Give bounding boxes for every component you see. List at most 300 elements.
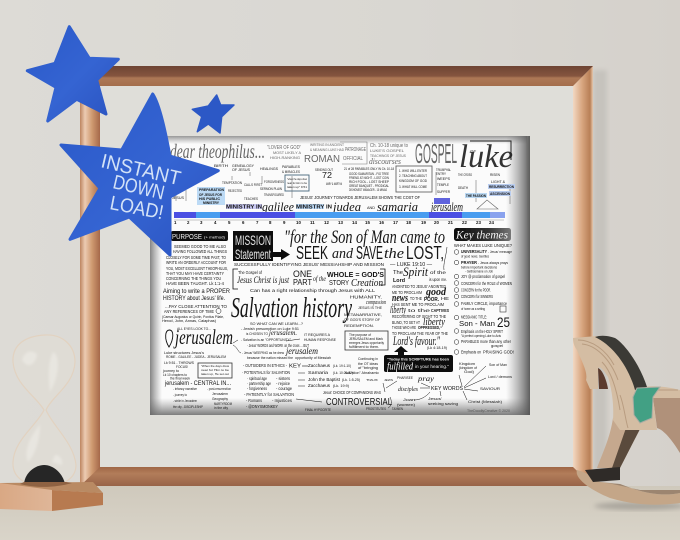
badge text <box>99 150 183 224</box>
text block: the spirit of the Lord: TO THE <box>410 296 422 301</box>
quote: Luke 19:10: "for the Son of Man came to <box>284 227 445 248</box>
theme list: CONCERN for SINNERS <box>461 294 493 299</box>
word map: key words: JEWS <box>384 378 393 382</box>
horse: wood grain <box>578 340 678 428</box>
text block: what can we learn: SO WHAT CAN WE LEARN...? <box>250 321 304 326</box>
text: bringing salvation: the OT ideas <box>358 362 378 366</box>
statement: controversial choices: FINAL HYPOCRITE <box>305 408 331 412</box>
theme list: FAMILY CIRCLE, importance <box>461 301 508 306</box>
theme list: - Jesus' message <box>488 250 512 254</box>
horse: saddle <box>633 387 660 423</box>
timeline chapter numbers: 19 <box>421 220 426 225</box>
word map: key words: Kingdom <box>459 362 475 366</box>
text block: the spirit of the Lord: POOR. <box>424 297 440 303</box>
note: lover of God: PATRONAGE <box>345 147 366 153</box>
text block: the spirit of the Lord: The <box>393 270 403 276</box>
note: lover of God: & MEANING LUKE HAD <box>310 148 344 152</box>
timeline annotations: right: FRIEND AT NIGHT - LOST COIN <box>349 176 390 180</box>
text block: central in list: MARTYRDOM <box>214 402 232 406</box>
callout: preparations: HIS PUBLIC <box>199 197 221 201</box>
text block: what can we learn: is CHOSEN TO <box>246 331 268 336</box>
picture frame <box>80 66 607 486</box>
statement: controversial choices: TAXMEN <box>392 407 403 411</box>
frame: left side <box>80 66 100 486</box>
text: Luke reference: — LUKE 19:10 — <box>390 262 432 268</box>
callout: when the days drew near: "When the days drew <box>201 364 230 368</box>
text block: route to jerusalem <box>162 351 226 380</box>
note: lover of God: OFFICIAL <box>343 156 363 162</box>
timeline annotations: right: DISHONEST MANAGER - 10 MINAS <box>349 188 388 192</box>
text block: what can we learn: because the nation missed the <box>247 355 294 360</box>
note: lover of God: WRITING IN ANCIENT <box>310 143 345 147</box>
rocking horse <box>573 336 680 510</box>
heading: all eyes look to jerusalem: jerusalem <box>173 325 233 349</box>
word map: key words: seeking saving <box>428 402 458 406</box>
text: bringing salvation: Continuing in <box>358 357 378 361</box>
text block: proper history: HISTORY about Jesus' life. <box>163 295 225 302</box>
text: relationship with all humanity <box>250 288 382 300</box>
theme list: JOY @ proclamation of gospel <box>461 274 505 279</box>
callout: the purpose of jerusalem <box>345 331 388 350</box>
text block: outsiders: - rejoice <box>276 381 291 386</box>
horse: mane <box>595 336 647 390</box>
text block: route to jerusalem: Lk 10 chapters to <box>163 373 187 377</box>
callout: when the days drew near: taken up, He set out <box>201 372 229 376</box>
text block: the spirit of the Lord: ANOINTED TO JESUS' ANOINTED <box>392 284 446 289</box>
callout: boxed quote timeline: MARY & MARTHA <box>326 182 342 186</box>
timeline chapter numbers: 13 <box>338 220 343 225</box>
text: relationship with all humanity: Can has a right relationship through Jesus with ALL <box>250 288 376 293</box>
text: bringing salvation <box>345 357 379 375</box>
text block: the spirit of the Lord: HE <box>441 296 449 301</box>
timeline chapter numbers: 1 <box>174 220 177 225</box>
text block: outsiders: - forgiveness <box>247 386 267 391</box>
note: chapters 10-18: Ch. 10-18 unique to <box>370 143 408 149</box>
text block: central in list: Geography <box>212 397 228 401</box>
panel: what makes Luke unique <box>444 243 514 354</box>
text block: what can we learn: - Jesus' WEEPING as he drew <box>242 350 284 355</box>
panel: mission statement: MISSION <box>235 232 271 248</box>
callout: when the days drew near: near for Him to be <box>201 368 229 372</box>
text block: central in list <box>173 387 232 410</box>
text block: route to jerusalem: Luke structures Jesus's <box>164 351 204 355</box>
boxed list: three lost things <box>396 166 432 192</box>
timeline chapter numbers: 21 <box>448 220 453 225</box>
text block: purpose: CLOSELY FOR SOME TIME PAST, TO <box>166 255 227 260</box>
text block: what can we learn: jerusalem <box>285 346 318 356</box>
text block: the spirit of the Lord: TO PROCLAIM THE YEAR OF THE <box>392 331 448 336</box>
timeline chapter numbers: 7 <box>256 220 259 225</box>
hourglass: glass bulbs <box>13 335 76 486</box>
theme list: Emphasis on <box>461 350 482 354</box>
timeline chapter numbers: 20 <box>434 220 439 225</box>
statement: one part of the whole <box>233 269 385 289</box>
theme list: Emphasis on the HOLY SPIRIT <box>461 329 503 334</box>
timeline chapter numbers: 10 <box>296 220 301 225</box>
callout: the purpose of jerusalem: fulfillment to them. <box>349 345 379 349</box>
text block: outsiders: - courage <box>276 386 293 391</box>
callout: preparations: MINISTRY <box>203 201 220 205</box>
poster inner shadow <box>150 136 530 415</box>
timeline chapter numbers: 4 <box>214 220 217 225</box>
timeline annotations: right: ENTRY <box>436 172 447 176</box>
text block: purpose: HAVING FOLLOWED ALL THINGS <box>173 249 227 254</box>
timeline annotations: right: DEATH <box>458 186 469 190</box>
text block: the spirit of the Lord: Spirit <box>403 264 428 279</box>
theme list: MESSIANIC TITLE: <box>461 314 487 320</box>
text block: outsiders: KEY <box>289 364 301 370</box>
timeline annotations: right: GREAT BANQUET - PRODIGAL <box>349 184 389 188</box>
text block: what can we learn: opportunity of Messiah <box>295 355 331 360</box>
text block: proper history: Aiming to write a PROPER <box>163 288 230 295</box>
text block: proper history: (Caesar Augustus or Quirin, Pontius Pilate, <box>162 315 224 319</box>
timeline annotations: right: SUPPER <box>437 190 451 194</box>
timeline chapter numbers: 18 <box>406 220 411 225</box>
text block: the spirit of the Lord: good <box>425 286 446 298</box>
timeline chapter numbers: 6 <box>242 220 245 225</box>
text block: outsiders: - PATIENTLY for SALVATION <box>244 392 294 397</box>
note: lover of God: MOST LIKELY A <box>273 151 302 155</box>
timeline chapter numbers: 11 <box>310 220 315 225</box>
list: key people: Zacchaeus <box>308 383 331 389</box>
hourglass: highlights <box>22 352 62 465</box>
callout: when the days drew near <box>198 363 232 378</box>
word map: key words: Joan <box>403 398 415 402</box>
hourglass: black sand <box>24 465 65 487</box>
note: chapters 10-18: discourses <box>369 157 401 166</box>
heading: purpose pill: PURPOSE <box>172 232 202 241</box>
timeline annotations: left: REJECTED <box>228 189 242 193</box>
horse: rocker <box>577 470 680 505</box>
poster content: GOSPEL <box>415 138 457 169</box>
panel: what makes Luke unique: WHAT MAKES LUKE UNIQUE? <box>454 243 513 248</box>
list: key people: (Lk. 1:5-25) <box>342 378 361 382</box>
star: large top-left <box>27 27 118 121</box>
text block: proper history: ...PAY CLOSE ATTENTION TO <box>165 304 228 309</box>
text: Luke reference <box>234 262 432 268</box>
timeline annotations: left: TEACHES <box>244 197 259 201</box>
callout: preparations: PREPARATION <box>199 188 225 192</box>
horse: neck and body <box>573 336 680 430</box>
frame: right side <box>573 66 593 486</box>
text block: purpose <box>166 244 228 286</box>
timeline chapter numbers: 12 <box>324 220 329 225</box>
statement: one part of the whole: STORY <box>329 280 349 287</box>
timeline annotations: left: FORGIVENESS <box>264 180 285 184</box>
quote: Luke 19:10: and <box>332 246 353 262</box>
text block: proper history: ANY REFERENCES OF TIME <box>164 309 214 314</box>
word map: key words: TheDoodlyCreative © 2020 <box>467 409 510 413</box>
callout: boxed quote timeline: 72 <box>322 171 333 180</box>
heading: dear theophilus: dear theophilus... <box>170 141 265 163</box>
timeline annotations: left: SERMON PLAIN <box>260 187 283 191</box>
heading: purpose pill <box>171 231 228 241</box>
timeline annotations: right: TEMPLE <box>437 183 450 187</box>
theme list: UNIVERSALITY <box>461 249 487 254</box>
text: relationship with all humanity: HUMANITY. <box>350 294 382 300</box>
timeline annotations: left: & MIRACLES <box>282 170 301 174</box>
timeline annotations: left: PARABLES <box>282 165 301 169</box>
text block: route to jerusalem: FOCUS! <box>176 365 188 369</box>
text block: purpose: YOU, MOST EXCELLENT THEOPHILUS, <box>166 266 228 271</box>
timeline chapter numbers: 14 <box>352 220 357 225</box>
text block: outsiders: - spiritual age <box>247 376 268 381</box>
timeline annotations: right: GOOD SAMARITAN - FIG TREE <box>349 172 390 176</box>
timeline annotations: right: 21 of 28 PARABLES ONLY IN Ch. 10-18 <box>344 166 395 171</box>
word map: key words: disciples <box>398 387 419 393</box>
word map: key words: PHARISEE <box>397 376 413 380</box>
text block: the spirit of the Lord: THOSE WHO ARE <box>392 325 416 330</box>
statement: controversial choices: PROSTITUTES <box>366 407 387 411</box>
text block: outsiders: - @ONYXMONKEY <box>246 404 278 409</box>
timeline chapter numbers: 15 <box>365 220 370 225</box>
word map: key words: Jesus' <box>428 397 442 401</box>
word map: key words: (kingdom of <box>459 366 477 370</box>
boxed list: three lost things: 3. WHAT WILL COME <box>399 185 427 189</box>
word map: key words: pray <box>417 375 435 383</box>
text block: outsiders: - Injustices <box>272 398 292 403</box>
poster paper <box>150 136 530 415</box>
callout: resurrection and ascension: RESURRECTION <box>489 185 514 189</box>
timeline annotations: right: RISEN <box>490 173 501 177</box>
text block: outsiders: - Romans <box>246 398 262 403</box>
text block: central in list: - while in Jerusalem <box>173 399 197 403</box>
text block: route to jerusalem: ROME - GALILEE - JUDEA - JERUSALEM <box>166 355 226 359</box>
note: lover of God <box>267 142 367 165</box>
text block: compassion column: OF GOD'S STORY OF <box>344 317 381 322</box>
timeline chapter numbers <box>174 220 494 225</box>
poster content <box>162 138 515 413</box>
callout: the purpose of jerusalem: emerges Jesus opportunity <box>349 341 384 345</box>
text block: central in list: in the city <box>214 406 228 410</box>
callout: boxed quote timeline: taken up" 9:51 <box>287 185 307 189</box>
callout: today this scripture fulfilled: in your hearing." <box>415 364 450 369</box>
list: key people: Samaria <box>308 370 328 376</box>
text block: central in list: the city - DISCIPLESHIP <box>173 405 204 409</box>
heading: jerusalem central in: jerusalem - CENTRAL IN... <box>164 381 231 387</box>
horse shadow <box>594 502 680 510</box>
text block: the spirit of the Lord: Lord <box>393 278 405 284</box>
timeline heading labels: MINISTRY IN <box>296 204 332 210</box>
word map: key words: Christ (Messiah) <box>468 400 503 404</box>
callout: resurrection and ascension: LIGHT & <box>491 180 505 184</box>
header band <box>170 138 457 169</box>
word map: key words: Lord / demons <box>488 375 512 379</box>
text block: the spirit of the Lord: CAPTIVES <box>431 308 449 313</box>
callout: the purpose of jerusalem: JERUSALEM and Mark <box>349 337 383 341</box>
badge text: DOWN <box>111 171 166 205</box>
text block: what can we learn <box>233 321 336 360</box>
timeline chapter numbers: 2 <box>187 220 190 225</box>
word map: key words: KEY WORDS <box>431 386 463 392</box>
timeline bar <box>174 212 505 220</box>
timeline annotations: left: HEALINGS <box>260 167 279 171</box>
text block: compassion column: REDEMPTION. <box>344 323 374 328</box>
text block: the spirit of the Lord: to the <box>408 308 432 313</box>
text block: the spirit of the Lord: of the <box>430 270 447 275</box>
theme list: PARABLES more than any other <box>461 339 512 344</box>
text: bringing salvation: salvation" Abrahamic <box>345 371 379 375</box>
list: key people: Zacchaeus <box>308 363 331 369</box>
timeline annotations: left <box>176 164 301 201</box>
text block: the spirit of the Lord: RECOVERING OF SIGHT TO THE <box>392 314 446 319</box>
frame: top side <box>80 66 593 86</box>
statement: one part of the whole: PART <box>293 277 312 287</box>
theme list: 25 <box>497 314 510 330</box>
timeline annotations: left: OF JESUS <box>232 168 251 172</box>
text block: the spirit of the Lord <box>390 264 449 350</box>
statement: one part of the whole: Jesus Christ is just <box>237 275 289 285</box>
timeline chapter numbers: 3 <box>200 220 203 225</box>
text block: what can we learn: jerusalem. <box>268 329 297 337</box>
arrow: mission to quote <box>273 249 290 260</box>
text block: compassion column <box>344 299 386 328</box>
timeline chapter numbers: 16 <box>379 220 384 225</box>
note: lover of God: "LOVER OF GOD" <box>267 145 301 151</box>
theme list: CONCERN for the ROLE of WOMEN <box>461 281 512 286</box>
list: key people <box>298 363 361 389</box>
theme list: before important decisions <box>461 266 497 270</box>
title: of Luke: OF <box>470 149 477 154</box>
statement: one part of the whole: The Gospel of <box>238 270 263 276</box>
boxed list: three lost things: 2. TEACHING ABOUT <box>399 174 428 178</box>
heading: all eyes look to jerusalem <box>166 325 233 349</box>
quote: Luke 19:10: SAVE <box>356 243 383 263</box>
list: key people: (Lk. 10:25-37) <box>333 371 354 375</box>
timeline heading labels: judea <box>331 199 361 214</box>
text block: outsiders: - partnership age <box>247 381 272 386</box>
text block: proper history: Herod, John, Annas, Caiaphas) <box>162 319 216 323</box>
star: small <box>192 95 234 133</box>
text block: purpose: THAT YOU MAY HAVE CERTAINTY <box>166 271 224 276</box>
timeline annotations: left: TEMPTATION <box>222 181 243 185</box>
text block: central in list: - post-resurrection <box>207 387 231 391</box>
panel: mission statement: Statement <box>235 246 271 262</box>
callout: preparations: OF JESUS FOR <box>199 193 223 197</box>
horse: front leg <box>597 418 640 468</box>
theme list: of home as a setting <box>461 307 485 311</box>
theme list: CONCERN for the POOR. <box>461 288 491 292</box>
timeline annotations: left: BIRTH <box>214 164 229 168</box>
text block: purpose: WRITE AN ORDERLY ACCOUNT FOR <box>166 260 226 265</box>
text block: compassion column: JESUS IS THE <box>358 305 382 310</box>
timeline annotations: right: THE CROSS <box>458 173 473 177</box>
callout: today this scripture fulfilled <box>384 355 453 372</box>
text block: proper history <box>162 288 230 323</box>
timeline heading labels: JESUS <box>172 195 184 200</box>
timeline annotations: left: GENEALOGY <box>232 164 255 168</box>
statement: one part of the whole: ONE <box>293 269 312 280</box>
text block: compassion column: compassion <box>366 299 386 306</box>
timeline chapter numbers: 24 <box>489 220 494 225</box>
statement: controversial choices: CONTROVERSIAL <box>326 397 392 408</box>
text block: the spirit of the Lord: OPPRESSED, <box>418 325 440 330</box>
text block: route to jerusalem: Lk 9:51 - THROWS <box>164 361 195 365</box>
word map: key words <box>366 362 512 413</box>
badge text: LOAD! <box>108 192 165 224</box>
note: lover of God: ROMAN <box>304 154 340 165</box>
timeline annotations: right: WEEPS <box>437 177 451 181</box>
text block: central in list: - journey to <box>173 393 187 397</box>
theme list: gospel <box>491 344 503 348</box>
text block: outsiders: - OUTSIDERS IN ETHICS - <box>243 363 288 368</box>
text block: the spirit of the Lord: HAS SENT ME TO PROCLAIM <box>392 302 445 307</box>
callout: resurrection and ascension <box>465 180 515 209</box>
note: chapters 10-18 <box>369 143 408 166</box>
text block: outsiders: - POTENTIALS for SALVATION <box>242 370 290 375</box>
timeline heading labels: jerusalem <box>430 199 463 214</box>
timeline chapter numbers: 9 <box>283 220 286 225</box>
text block: outsiders: - sisters <box>276 376 290 381</box>
note: lover of God: HIGH-RANKING <box>270 156 300 160</box>
text block: the spirit of the Lord: liberty <box>390 305 406 316</box>
boxed list: three lost things: 1. WHO WILL ENTER <box>399 169 427 173</box>
timeline chapter numbers: 23 <box>476 220 481 225</box>
text block: route to jerusalem: journey to <box>162 369 179 373</box>
callout: boxed quote timeline: "when the days drew <box>287 177 308 181</box>
text block: central in list: - infancy narrative <box>173 387 197 391</box>
callout: preparations <box>197 187 225 205</box>
icon: location pin <box>166 330 173 347</box>
statement: one part of the whole: WHOLE = GOD'S <box>327 270 384 279</box>
timeline annotations: right: TRIUMPHAL <box>436 168 451 172</box>
text block: purpose: HAVE BEEN TAUGHT. Lk 1:1-4 <box>166 281 225 286</box>
callout: boxed quote timeline <box>285 168 342 191</box>
arrow: up to Lord's favour <box>394 346 408 356</box>
text block: what can we learn: - Jesus' WORDS and WORK on the cross ... BUT <box>247 343 309 348</box>
heading: salvation history: Salvation history <box>231 293 352 324</box>
timeline heading labels: JESUS' JOURNEY TOWARDS JERUSALEM SHOWS THE COST OF <box>300 195 420 200</box>
theme list: Son - Man <box>459 319 495 328</box>
text block: route to jerusalem: the final week <box>170 376 190 380</box>
text block: outsiders <box>242 363 308 409</box>
statement: controversial choices <box>296 390 403 412</box>
star badge: instant download <box>61 94 218 255</box>
badge text: INSTANT <box>99 150 183 190</box>
word map: key words: SAVIOUR <box>480 387 500 391</box>
text block: purpose: SEEMED GOOD TO ME ALSO <box>174 244 227 249</box>
poster: Gospel of Luke <box>150 136 530 415</box>
heading: key themes: Key themes <box>455 228 508 242</box>
text block: what can we learn: - Salvation is an "OPPORTUNITY" <box>241 337 291 342</box>
quote: Luke 19:10 <box>284 227 445 263</box>
theme list: PRAYER <box>461 260 477 265</box>
text block: what can we learn: HUMAN RESPONSE <box>304 337 336 342</box>
statement: controversial choices: Jesus' CHOICE OF COMPANIONS WAS <box>323 390 381 395</box>
theme list: "A perfect opening Luke to Acts <box>461 334 501 338</box>
text block: purpose: CONCERNING THE THINGS YOU <box>166 276 221 281</box>
timeline heading labels: samaria <box>377 199 418 214</box>
text block: the spirit of the Lord: news <box>392 293 408 304</box>
text: Luke reference: SUCCESSFULLY IDENTIFYING JESUS' MESSIAHSHIP AND MISSION <box>234 262 384 267</box>
theme list: - Jesus always prays <box>478 261 508 265</box>
horse: back body shade <box>653 398 680 453</box>
theme list: - Gethsemane on Job <box>465 270 493 274</box>
wooden base <box>0 482 103 511</box>
callout: today this scripture fulfilled: fulfilled <box>387 362 414 372</box>
timeline annotations: right: RICH FOOL - LOST SHEEP <box>349 180 390 184</box>
theme list <box>454 249 514 354</box>
horse: hooves <box>585 467 620 482</box>
timeline heading labels <box>172 195 463 214</box>
heading: purpose pill: (+ method) <box>204 234 226 240</box>
callout: today this scripture fulfilled: "Today this SCRIPTURE has been <box>387 358 450 362</box>
timeline annotations: left: TRANSFIGURED <box>264 193 284 197</box>
text block: what can we learn: IT REQUIRES A <box>304 332 330 337</box>
text block: the spirit of the Lord: is upon me. <box>429 277 447 282</box>
timeline heading labels: galilee <box>262 199 294 214</box>
quote: Luke 19:10: the <box>384 246 404 262</box>
